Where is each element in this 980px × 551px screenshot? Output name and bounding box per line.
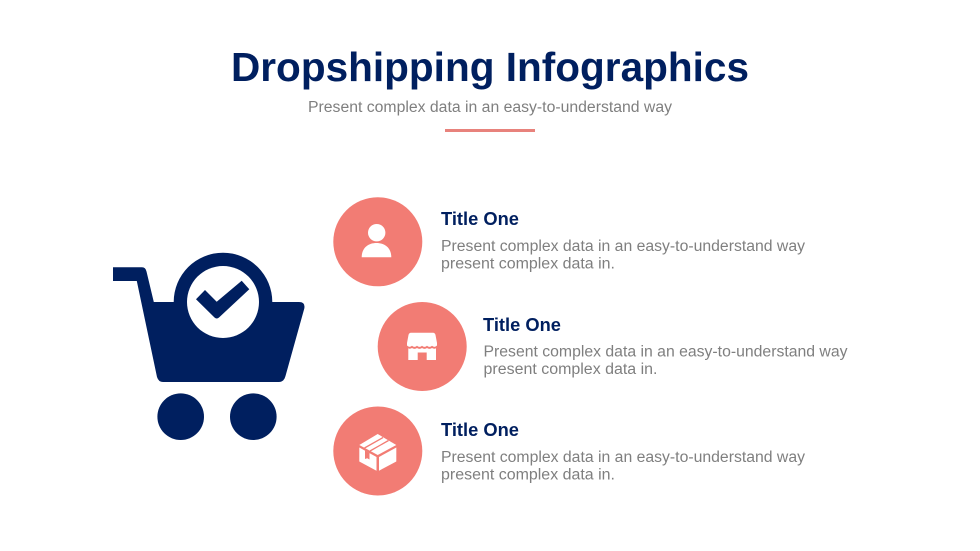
item two description: present complex data in. (484, 361, 658, 378)
item three (333, 406, 805, 496)
icon: parcel box in coral circle (333, 406, 422, 496)
title underline accent (445, 129, 535, 132)
item one heading: Title One (441, 208, 519, 229)
item one description: present complex data in. (441, 256, 615, 272)
item three description: present complex data in. (441, 466, 615, 484)
item one (333, 197, 805, 286)
item two heading: Title One (483, 314, 561, 335)
item two (378, 302, 848, 391)
item two description: Present complex data in an easy-to-understand way (484, 344, 848, 360)
title: Dropshipping Infographics (231, 44, 749, 90)
icon: person in coral circle (333, 197, 422, 286)
icon: shopping cart with check mark (113, 253, 304, 440)
icon: storefront in coral circle (378, 302, 467, 391)
item three description: Present complex data in an easy-to-understand way (441, 449, 805, 466)
item one description: Present complex data in an easy-to-understand way (441, 238, 805, 255)
item three heading: Title One (441, 419, 519, 440)
subtitle: Present complex data in an easy-to-understand way (308, 99, 672, 116)
